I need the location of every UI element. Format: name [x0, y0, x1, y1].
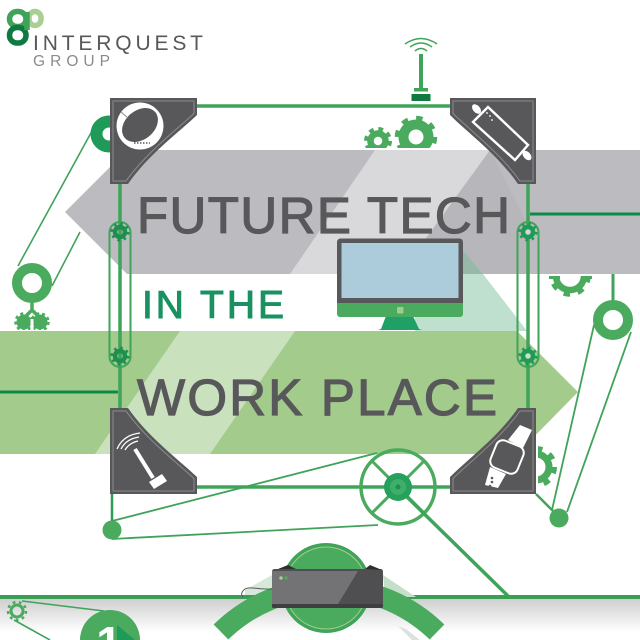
wheel and belts [102, 450, 508, 596]
upper ring [96, 122, 122, 146]
monitor frame [337, 238, 463, 303]
panel: smartwatch corner [450, 408, 536, 494]
bottom rule [0, 595, 640, 599]
sprocket top [112, 224, 128, 240]
left chain and sprockets [110, 222, 130, 367]
step one badge [80, 610, 140, 640]
shadow on grey band [463, 250, 483, 274]
logo [10, 12, 203, 70]
icon: smart ring [115, 101, 165, 150]
monitor chin [337, 302, 463, 317]
lower ring [17, 268, 47, 298]
icon: smartwatch [485, 425, 532, 488]
monitor button [397, 307, 404, 314]
left pulley ring and belt [16, 122, 122, 330]
logo wordmark: INTERQUEST [33, 32, 203, 55]
antenna [405, 38, 437, 101]
grey arrow band [65, 150, 640, 274]
left ball [102, 520, 122, 540]
frame lines [120, 106, 528, 487]
right half gear under grey band [549, 276, 592, 297]
cable [242, 588, 272, 597]
monitor icon [337, 238, 463, 330]
panel: smart pen corner [450, 98, 536, 184]
monitor stand [378, 316, 422, 330]
small gear and belt at bottom left [8, 601, 104, 640]
pulley ball [550, 508, 568, 528]
right chain and sprockets [518, 222, 538, 367]
bottom shadow gradient [0, 599, 640, 632]
sprocket bottom [112, 348, 128, 364]
small gear [366, 129, 390, 153]
small gear [11, 605, 23, 617]
monitor shadow [415, 250, 527, 331]
right pulley and belt [536, 274, 631, 528]
device on green dial [221, 543, 437, 640]
large gear [397, 118, 435, 156]
device lights [279, 576, 283, 580]
monitor screen [342, 243, 458, 298]
pulley ring [598, 305, 628, 335]
logo mark [10, 12, 41, 43]
sprocket bottom [520, 348, 536, 364]
wheel hub [384, 473, 412, 501]
wifi waves [405, 38, 437, 51]
dial circle [281, 543, 371, 633]
panel: smart ring corner [110, 98, 197, 184]
title: future tech: FUTURE TECH [137, 187, 510, 244]
half gear at bottom right panel [538, 446, 557, 486]
title: work place: WORK PLACE [137, 369, 497, 426]
device body [272, 569, 383, 608]
horizontal dark lines [0, 390, 118, 394]
sprocket top [520, 224, 536, 240]
green arrow band [0, 331, 578, 454]
dial arc [221, 588, 437, 632]
logo subline: GROUP [33, 53, 110, 70]
gears above grey band [366, 118, 435, 156]
mini gears [16, 314, 48, 330]
icon: beacon antenna [117, 433, 167, 489]
title: in the: IN THE [142, 284, 284, 327]
icon: pen device [470, 103, 533, 162]
pale shadows [383, 575, 416, 597]
wheel rim [361, 450, 435, 524]
panel: beacon corner [110, 408, 197, 494]
